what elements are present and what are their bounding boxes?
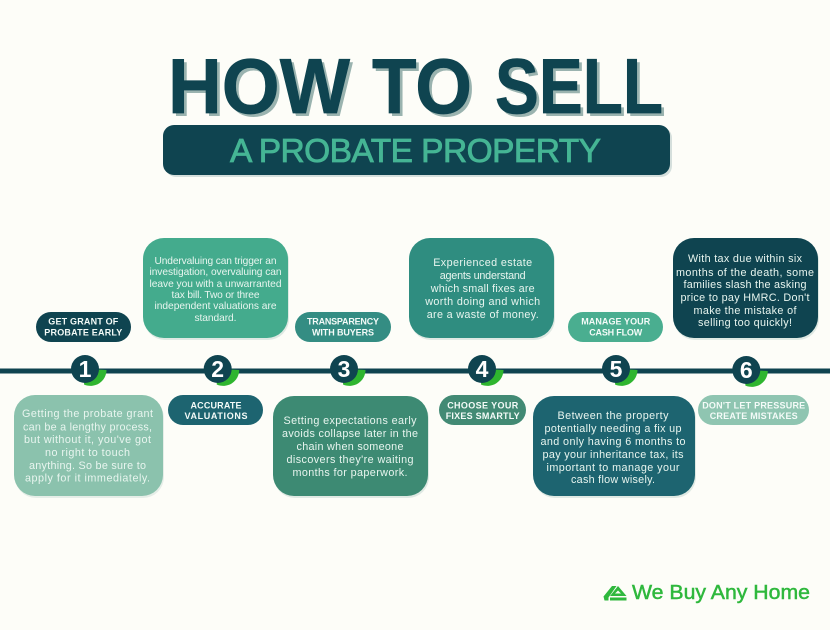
step 6 label: DON'T LET PRESSURE <box>702 400 805 410</box>
step 3 text card <box>273 396 429 498</box>
step 1 text card: no right to touch <box>45 447 130 459</box>
step 6 label <box>698 395 809 425</box>
step 4 text card: which small fixes are <box>430 283 535 295</box>
step 6 marker: 6 <box>740 357 753 383</box>
step 6 text card: With tax due within six <box>688 253 803 265</box>
step 6 text card: price to pay HMRC. Don't <box>680 292 810 304</box>
step 2 marker <box>204 355 239 386</box>
step 1 label <box>36 312 131 342</box>
step 4 text card <box>409 238 555 340</box>
title: HOW <box>171 45 353 133</box>
step 4 text card: are a waste of money. <box>427 309 539 321</box>
step 2 marker: 2 <box>211 356 224 382</box>
step 6 text card: selling too quickly! <box>698 317 792 329</box>
step 5 text card: pay your inheritance tax, its <box>542 449 684 461</box>
step 4 marker: 4 <box>476 356 489 382</box>
step 3 text card: months for paperwork. <box>292 467 408 479</box>
step 2 label: VALUATIONS <box>184 411 248 421</box>
step 3 <box>273 312 429 498</box>
step 4 label: CHOOSE YOUR <box>447 400 519 410</box>
step 1 marker <box>71 355 106 386</box>
step 3 text card: avoids collapse later in the <box>282 428 418 440</box>
step 1 text card: can be a lengthy process, <box>23 422 152 434</box>
title: HOW <box>168 42 350 130</box>
title: TO <box>372 42 472 130</box>
step 2 text card: Undervaluing can trigger an <box>154 256 276 267</box>
step 4 marker <box>468 355 504 386</box>
step 2 text card: investigation, overvaluing can <box>150 267 282 278</box>
step 5 label: MANAGE YOUR <box>581 316 651 326</box>
step 2 text card: standard. <box>194 313 236 324</box>
step 5 text card: Between the property <box>558 410 669 422</box>
step 1 label: GET GRANT OF <box>48 316 119 326</box>
step 2 text card: independent valuations are <box>154 301 277 312</box>
step 2 label: ACCURATE <box>190 400 242 410</box>
step 5 marker <box>602 355 638 386</box>
step 1 text card: apply for it immediately. <box>25 472 150 484</box>
step 1 text card: Getting the probate grant <box>22 408 153 420</box>
step 5 text card <box>533 396 696 498</box>
step 4 text card: worth doing and which <box>424 296 540 308</box>
step 3 label: TRANSPARENCY <box>307 316 379 326</box>
step 2 text card: leave you with a unwarranted <box>150 279 282 290</box>
icon: house <box>604 586 626 600</box>
step 5 label <box>568 312 663 342</box>
subtitle banner: A PROBATE PROPERTY <box>230 133 601 170</box>
step 5 text card: cash flow wisely. <box>571 474 655 486</box>
step 5 label: CASH FLOW <box>589 327 643 337</box>
logo: We Buy Any Home <box>632 581 810 604</box>
title <box>168 42 666 133</box>
step 3 marker <box>330 355 366 386</box>
step 2 text card <box>143 238 289 340</box>
step 5 text card: potentially needing a fix up <box>544 423 682 435</box>
step 1 <box>14 312 164 498</box>
step 6 text card: families slash the asking <box>684 279 806 291</box>
step 4 text card: Experienced estate <box>433 257 532 269</box>
step 3 text card: chain when someone <box>296 441 404 453</box>
step 3 label: WITH BUYERS <box>312 327 374 337</box>
step 1 marker: 1 <box>79 356 92 382</box>
step 1 label: PROBATE EARLY <box>44 327 122 337</box>
step 6 text card: months of the death, some <box>676 267 814 279</box>
step 4 label <box>439 395 526 425</box>
step 6 text card: make the mistake of <box>694 305 798 317</box>
step 6 <box>673 238 819 425</box>
step 6 label: CREATE MISTAKES <box>710 411 798 421</box>
step 3 text card: discovers they're waiting <box>286 454 414 466</box>
step 1 text card <box>14 395 164 498</box>
title: TO <box>375 45 475 133</box>
step 2 label <box>168 395 263 425</box>
step 5 <box>533 312 696 498</box>
step 4 <box>409 238 555 425</box>
step 3 label <box>295 312 391 342</box>
step 5 text card: and only having 6 months to <box>540 436 686 448</box>
step 6 text card <box>673 238 819 340</box>
step 1 text card: but without it, you've got <box>24 434 151 446</box>
subtitle banner <box>163 125 672 177</box>
step 3 marker: 3 <box>338 356 350 382</box>
step 4 text card: agents understand <box>440 270 526 282</box>
step 4 label: FIXES SMARTLY <box>446 411 520 421</box>
title: SELL <box>495 42 663 130</box>
step 5 marker: 5 <box>610 356 623 382</box>
step 2 text card: tax bill. Two or three <box>172 290 260 301</box>
title: SELL <box>498 45 666 133</box>
step 6 marker <box>732 356 768 387</box>
timeline line <box>0 368 830 374</box>
step 5 text card: important to manage your <box>546 462 680 474</box>
step 3 text card: Setting expectations early <box>284 415 417 427</box>
step 2 <box>143 238 289 425</box>
step 1 text card: anything. So be sure to <box>29 460 146 472</box>
